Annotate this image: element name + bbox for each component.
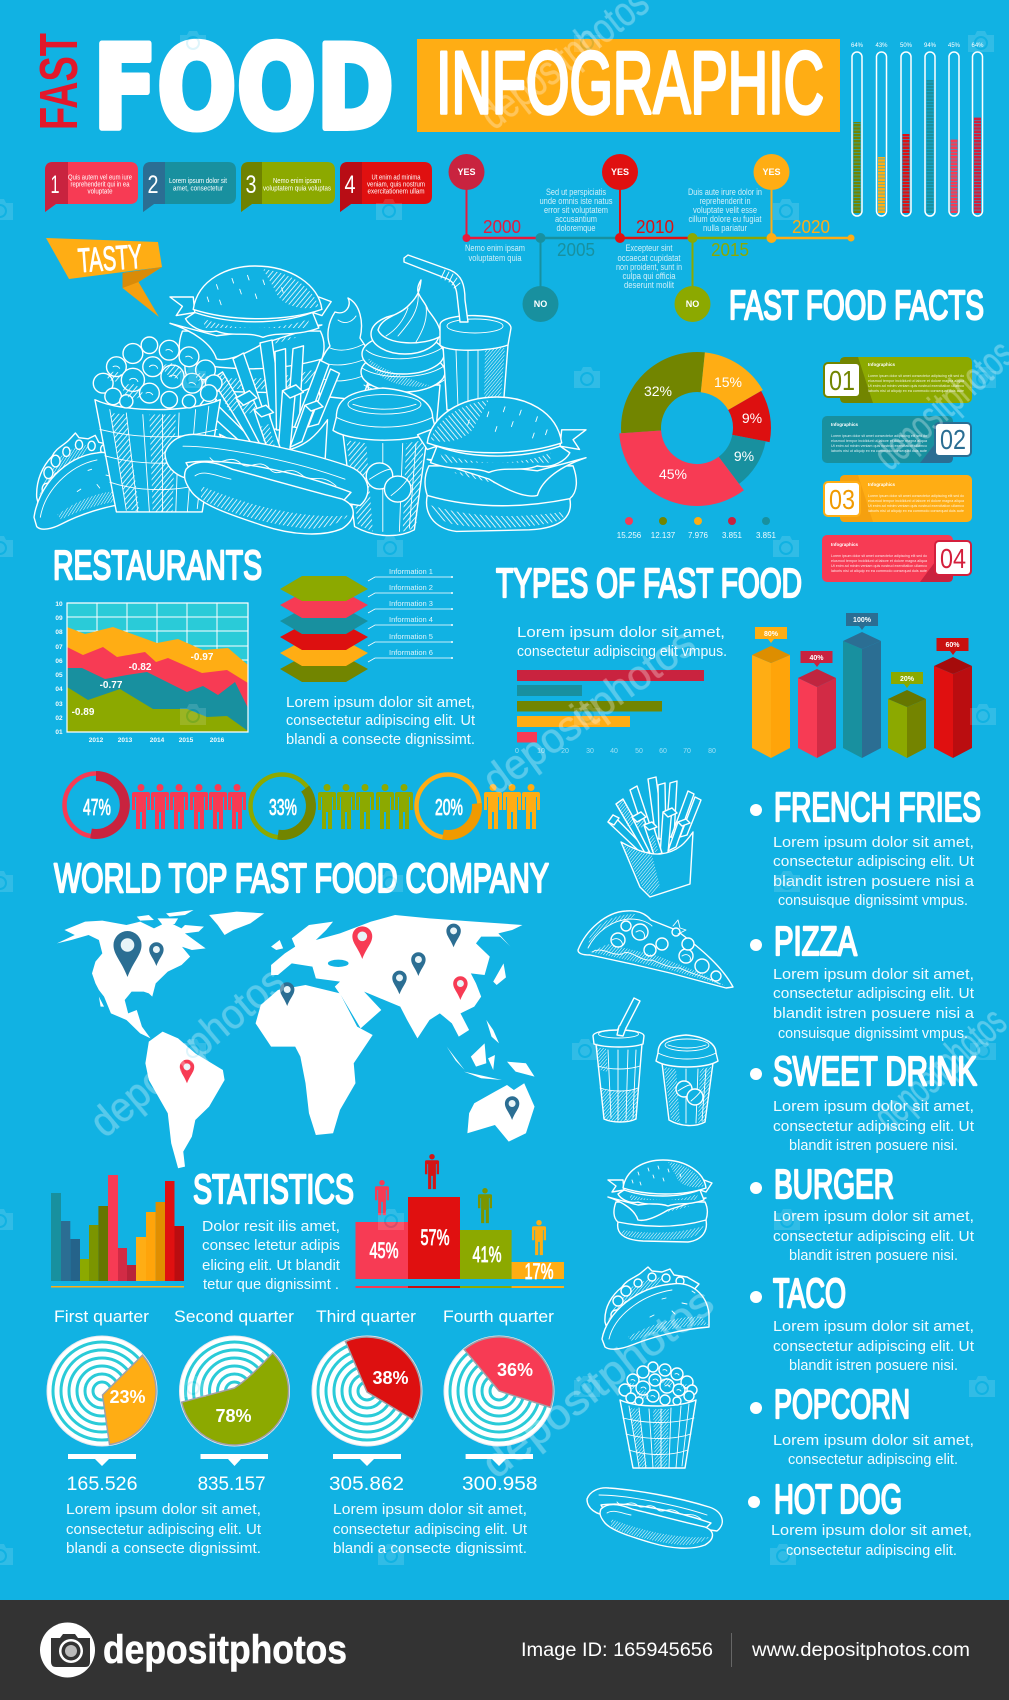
timeline: NO bbox=[686, 299, 699, 309]
horizontal bar chart: 50 bbox=[635, 748, 643, 755]
ring 33% bbox=[250, 774, 314, 838]
icon: taco bbox=[602, 1267, 709, 1349]
timeline: cillum dolore eu fugiat bbox=[688, 214, 762, 224]
timeline: 2000 bbox=[483, 217, 521, 237]
bar 100% bbox=[843, 613, 881, 758]
list: pizza bbox=[750, 918, 975, 1042]
horizontal bar chart bbox=[515, 670, 716, 755]
hexagon labels: Information 3 bbox=[389, 599, 433, 608]
list: french fries: blandit istren posuere nisi a bbox=[773, 874, 975, 890]
card 03: Lorem ipsum dolor sit amet consectetur adipiscing elit sed do bbox=[868, 493, 965, 498]
area chart: -0.89 bbox=[72, 707, 95, 718]
area chart: -0.97 bbox=[191, 652, 214, 663]
card 03 bbox=[824, 475, 972, 522]
paragraph: quarters right: consectetur adipiscing elit. Ut bbox=[333, 1522, 527, 1538]
list: sweet drink: blandit istren posuere nisi. bbox=[789, 1138, 958, 1154]
timeline: Sed ut perspiciatis bbox=[546, 187, 606, 197]
tab 3: voluptatem quia voluptas bbox=[263, 186, 331, 192]
timeline: voluptatem quia bbox=[468, 253, 522, 263]
icon: hot dog bbox=[587, 1488, 722, 1548]
bar 20%: 20% bbox=[900, 676, 915, 683]
ring 20%: 20% bbox=[435, 794, 463, 820]
list: french fries: consuisque dignissimt vmpus. bbox=[778, 893, 968, 909]
numbered tabs bbox=[45, 162, 432, 212]
area chart: 01 bbox=[55, 729, 63, 736]
watermark: depositphotos bbox=[473, 1278, 722, 1487]
icon: popcorn bbox=[619, 1362, 697, 1468]
card 04: Infographics bbox=[831, 542, 858, 547]
timeline: Duis aute irure dolor in bbox=[688, 187, 762, 197]
footer image id bbox=[521, 1633, 970, 1667]
paragraph: quarters right: Lorem ipsum dolor sit amet, bbox=[333, 1502, 527, 1518]
list: french fries bbox=[750, 784, 981, 909]
thermometer bars: 50% bbox=[900, 43, 913, 49]
paragraph: restaurants bbox=[286, 695, 475, 748]
area chart: 09 bbox=[55, 615, 63, 622]
donut chart: 9% bbox=[734, 448, 754, 464]
hexagon labels bbox=[368, 567, 453, 662]
hexagon labels: Information 6 bbox=[389, 648, 433, 657]
donut chart: 45% bbox=[659, 466, 687, 482]
timeline: nulla pariatur bbox=[703, 223, 747, 233]
area chart bbox=[55, 601, 248, 744]
paragraph: statistics bbox=[202, 1219, 340, 1293]
paragraph: types bbox=[517, 625, 727, 660]
card 02: laboris nisi ut aliquip ex ea commodo consequat duis aute bbox=[831, 448, 928, 453]
timeline: voluptate velit esse bbox=[693, 205, 757, 215]
food sketch collage bbox=[34, 255, 586, 536]
donut chart: 9% bbox=[742, 410, 762, 426]
quarter pie: fourth: 36% bbox=[497, 1360, 533, 1380]
quarter labels bbox=[54, 1308, 555, 1326]
card 03: Ut enim ad minim veniam quis nostrud exercitation ullamco bbox=[868, 503, 965, 508]
thermometer bars: 45% bbox=[948, 43, 961, 49]
card 02 bbox=[822, 416, 971, 463]
list: burger: Lorem ipsum dolor sit amet, bbox=[773, 1209, 974, 1225]
thermometer bars: 64% bbox=[971, 43, 984, 49]
area chart: 07 bbox=[55, 644, 63, 651]
list: pizza: PIZZA bbox=[774, 918, 857, 964]
heading: restaurants: RESTAURANTS bbox=[53, 542, 262, 588]
heading: statistics: STATISTICS bbox=[193, 1166, 354, 1212]
card 03: laboris nisi ut aliquip ex ea commodo consequat duis aute bbox=[868, 508, 965, 513]
card 01 bbox=[824, 357, 972, 403]
donut chart bbox=[617, 352, 777, 540]
thermometer bars: 64% bbox=[851, 43, 864, 49]
footer image id: Image ID: 165945656 bbox=[521, 1640, 713, 1661]
banner: tasty: TASTY bbox=[77, 238, 143, 280]
ring 33%: 33% bbox=[269, 794, 297, 820]
quarter labels: Second quarter bbox=[174, 1308, 295, 1326]
area chart: 10 bbox=[55, 601, 63, 608]
tab 4: veniam, quis nostrum bbox=[367, 182, 425, 188]
tab 2 bbox=[143, 162, 236, 212]
thermometer bars: 43% bbox=[875, 43, 888, 49]
horizontal bar chart: 20 bbox=[561, 748, 569, 755]
timeline: NO bbox=[534, 299, 547, 309]
card 01: eiusmod tempor incididunt ut labore et dolore magna aliqua bbox=[868, 378, 965, 383]
card 03: Infographics bbox=[868, 482, 895, 487]
tab 1 bbox=[45, 162, 138, 212]
donut legend: 7.976 bbox=[688, 531, 709, 540]
timeline: unde omnis iste natus bbox=[540, 196, 613, 206]
area chart: 06 bbox=[55, 658, 63, 665]
timeline: non proident, sunt in bbox=[616, 262, 682, 272]
timeline: deserunt mollit bbox=[624, 280, 674, 290]
card 01: Lorem ipsum dolor sit amet consectetur adipiscing elit sed do bbox=[868, 373, 965, 378]
list: hot dog: Lorem ipsum dolor sit amet, bbox=[771, 1523, 972, 1539]
donut legend bbox=[617, 517, 777, 540]
banner: tasty bbox=[46, 238, 162, 317]
timeline: YES bbox=[457, 167, 476, 177]
area chart: 2015 bbox=[179, 737, 194, 744]
paragraph: statistics: Dolor resit ilis amet, bbox=[202, 1219, 340, 1235]
card 01: Infographics bbox=[868, 362, 895, 367]
list: hot dog bbox=[748, 1476, 972, 1559]
tab 4: exercitationem ullam bbox=[368, 188, 425, 196]
footer logo bbox=[40, 1622, 347, 1678]
card 04: Lorem ipsum dolor sit amet consectetur adipiscing elit sed do bbox=[831, 553, 928, 558]
card 04: eiusmod tempor incididunt ut labore et dolore magna aliqua bbox=[831, 558, 928, 563]
paragraph: quarters left: blandi a consecte dignissimt. bbox=[66, 1541, 261, 1557]
quarter pie: third: 38% bbox=[372, 1368, 409, 1388]
list: sweet drink bbox=[750, 1048, 977, 1154]
paragraph: types: consectetur adipiscing elit vmpus. bbox=[517, 644, 727, 660]
list: burger: consectetur adipiscing elit. Ut bbox=[773, 1229, 974, 1245]
horizontal bar chart: 0 bbox=[515, 748, 519, 755]
red people bbox=[132, 784, 246, 829]
list: burger: blandit istren posuere nisi. bbox=[789, 1248, 958, 1264]
ring 47%: 47% bbox=[83, 794, 111, 820]
list: hot dog: consectetur adipiscing elit. bbox=[786, 1543, 957, 1559]
heading: types of fast food: TYPES OF FAST FOOD bbox=[496, 560, 802, 606]
heading: world top fast food company: WORLD TOP FAST FOOD COMPANY bbox=[54, 855, 549, 901]
timeline: error sit voluptatem bbox=[544, 205, 608, 215]
quarter pie: second: 835.157 bbox=[198, 1474, 266, 1495]
card 01: laboris nisi ut aliquip ex ea commodo consequat duis aute bbox=[868, 388, 965, 393]
list: sweet drink: consectetur adipiscing elit. Ut bbox=[773, 1119, 974, 1135]
paragraph: restaurants: Lorem ipsum dolor sit amet, bbox=[286, 695, 475, 711]
timeline: 2020 bbox=[792, 217, 830, 237]
tab 1: Quis autem vel eum iure bbox=[68, 174, 132, 182]
quarter pie: first bbox=[47, 1336, 157, 1495]
timeline: Nemo enim ipsam bbox=[465, 243, 525, 253]
3d bar chart bbox=[752, 613, 972, 758]
donut chart: 32% bbox=[644, 383, 672, 399]
column chart bbox=[51, 1175, 184, 1288]
podium chart: 17% bbox=[524, 1259, 554, 1284]
quarter pie: first: 23% bbox=[109, 1387, 146, 1407]
list: pizza: consuisque dignissimt vmpus. bbox=[778, 1026, 968, 1042]
timeline: YES bbox=[611, 167, 629, 177]
timeline: Excepteur sint bbox=[626, 243, 673, 253]
area chart: 02 bbox=[55, 715, 63, 722]
bar 80% bbox=[752, 627, 790, 758]
horizontal bar chart: 60 bbox=[659, 748, 667, 755]
quarter pie: second: 78% bbox=[215, 1406, 252, 1426]
card 03: 03 bbox=[829, 484, 855, 515]
area chart: 2012 bbox=[89, 737, 104, 744]
tab 2: amet, consectetur bbox=[173, 186, 224, 192]
quarter labels: First quarter bbox=[54, 1308, 150, 1326]
watermark: depositphotos bbox=[81, 957, 293, 1146]
bar 60%: 60% bbox=[945, 642, 960, 649]
bar 40% bbox=[798, 651, 836, 758]
list: popcorn: POPCORN bbox=[774, 1381, 910, 1427]
tab 3: 3 bbox=[246, 171, 256, 199]
bar 80%: 80% bbox=[764, 631, 779, 638]
list: popcorn: Lorem ipsum dolor sit amet, bbox=[773, 1433, 974, 1449]
donut legend: 15.256 bbox=[617, 531, 642, 540]
card 04: laboris nisi ut aliquip ex ea commodo consequat duis aute bbox=[831, 568, 928, 573]
paragraph: statistics: elicing elit. Ut blandit bbox=[202, 1258, 340, 1274]
footer logo: depositphotos bbox=[103, 1628, 347, 1672]
timeline bbox=[448, 154, 854, 322]
tab 3 bbox=[241, 162, 335, 212]
footer bar bbox=[0, 1600, 1009, 1700]
quarter pie: first: 165.526 bbox=[66, 1474, 138, 1495]
watermark: depositphotos bbox=[474, 618, 704, 803]
list: french fries: consectetur adipiscing elit. Ut bbox=[773, 854, 974, 870]
area chart: 2014 bbox=[150, 737, 165, 744]
card 01: Ut enim ad minim veniam quis nostrud exercitation ullamco bbox=[868, 383, 965, 388]
podium chart: 57% bbox=[420, 1225, 450, 1250]
title bbox=[29, 21, 840, 156]
quarter pie: fourth: 300.958 bbox=[462, 1474, 538, 1495]
stacked hexagons bbox=[280, 567, 453, 682]
list: pizza: Lorem ipsum dolor sit amet, bbox=[773, 967, 974, 983]
card 04: 04 bbox=[940, 543, 966, 574]
icon: french fries bbox=[608, 777, 701, 897]
area chart: 03 bbox=[55, 701, 63, 708]
donut legend: 3.851 bbox=[756, 531, 777, 540]
list: pizza: blandit istren posuere nisi a bbox=[773, 1006, 975, 1022]
card 02: Ut enim ad minim veniam quis nostrud exercitation ullamco bbox=[831, 443, 928, 448]
podium chart: 41% bbox=[472, 1242, 502, 1267]
timeline: culpa qui officia bbox=[622, 271, 676, 281]
list: taco: TACO bbox=[773, 1270, 846, 1316]
paragraph: types: Lorem ipsum dolor sit amet, bbox=[517, 625, 725, 641]
icon: drinks bbox=[593, 998, 718, 1126]
tab 4 bbox=[340, 162, 432, 212]
list: french fries: Lorem ipsum dolor sit amet, bbox=[773, 835, 974, 851]
horizontal bar chart: 80 bbox=[708, 748, 716, 755]
tab 1: 1 bbox=[50, 171, 60, 199]
paragraph: quarters left: consectetur adipiscing elit. Ut bbox=[66, 1522, 261, 1538]
ring 47% bbox=[64, 774, 128, 836]
area chart: 2013 bbox=[118, 737, 133, 744]
bar 100%: 100% bbox=[853, 617, 872, 624]
donut chart: 15% bbox=[714, 374, 742, 390]
quarter pie: third: 305.862 bbox=[329, 1474, 404, 1495]
donut legend: 3.851 bbox=[722, 531, 743, 540]
card 03: eiusmod tempor incididunt ut labore et dolore magna aliqua bbox=[868, 498, 965, 503]
donut legend: 12.137 bbox=[651, 531, 676, 540]
timeline: reprehenderit in bbox=[700, 196, 750, 206]
hexagon labels: Information 1 bbox=[389, 567, 433, 576]
tab 4: Ut enim ad minima bbox=[372, 174, 421, 182]
thermometer bars bbox=[851, 43, 984, 216]
map pins bbox=[114, 924, 519, 1120]
list: taco: Lorem ipsum dolor sit amet, bbox=[773, 1319, 974, 1335]
podium chart: 45% bbox=[370, 1238, 398, 1263]
timeline: accusantium bbox=[555, 214, 597, 224]
title: FOOD bbox=[93, 21, 394, 156]
paragraph: quarters right bbox=[333, 1502, 527, 1557]
paragraph: statistics: tetur que dignissimt . bbox=[203, 1277, 339, 1293]
list: burger: BURGER bbox=[774, 1161, 894, 1207]
card 01: 01 bbox=[829, 365, 855, 396]
timeline: 2005 bbox=[557, 240, 595, 260]
paragraph: restaurants: blandi a consecte dignissimt. bbox=[286, 732, 475, 748]
horizontal bar chart: 10 bbox=[537, 748, 545, 755]
tab 1: reprehenderit qui in ea bbox=[70, 182, 130, 188]
quarter labels: Fourth quarter bbox=[443, 1308, 555, 1326]
fact cards bbox=[822, 357, 972, 582]
list: popcorn bbox=[750, 1381, 974, 1468]
horizontal bar chart: 40 bbox=[610, 748, 618, 755]
tab 2: Lorem ipsum dolor sit bbox=[169, 178, 227, 185]
card 02: Infographics bbox=[831, 422, 858, 427]
paragraph: quarters left: Lorem ipsum dolor sit amet, bbox=[66, 1502, 261, 1518]
area chart: 2016 bbox=[210, 737, 225, 744]
hexagon labels: Information 2 bbox=[389, 583, 433, 592]
list: pizza: consectetur adipiscing elit. Ut bbox=[773, 986, 974, 1002]
timeline: 2010 bbox=[636, 217, 674, 237]
paragraph: restaurants: consectetur adipiscing elit. Ut bbox=[286, 713, 475, 729]
area chart: -0.77 bbox=[100, 680, 123, 691]
tab 2: 2 bbox=[148, 171, 158, 199]
horizontal bar chart: 30 bbox=[586, 748, 594, 755]
icon: burger bbox=[608, 1160, 712, 1242]
card 04 bbox=[822, 535, 971, 582]
card 02: 02 bbox=[940, 424, 966, 455]
tab 3: Nemo enim ipsam bbox=[273, 178, 321, 185]
quarter labels: Third quarter bbox=[316, 1308, 417, 1326]
list: burger bbox=[750, 1161, 974, 1264]
bar 60% bbox=[934, 638, 972, 758]
footer image id: www.depositphotos.com bbox=[751, 1640, 970, 1661]
card 02: Lorem ipsum dolor sit amet consectetur adipiscing elit sed do bbox=[831, 433, 928, 438]
horizontal bar chart: 70 bbox=[683, 748, 691, 755]
quarter pie: third bbox=[312, 1336, 422, 1495]
area chart: 05 bbox=[55, 672, 63, 679]
green people bbox=[318, 784, 413, 829]
list: sweet drink: Lorem ipsum dolor sit amet, bbox=[773, 1099, 974, 1115]
quarter pie: second bbox=[180, 1336, 290, 1495]
thermometer bars: 94% bbox=[924, 43, 937, 49]
hexagon labels: Information 5 bbox=[389, 632, 433, 641]
timeline: occaecat cupidatat bbox=[618, 253, 681, 263]
list: popcorn: consectetur adipiscing elit. bbox=[788, 1452, 958, 1468]
paragraph: quarters right: blandi a consecte dignissimt. bbox=[333, 1541, 527, 1557]
timeline: 2015 bbox=[711, 240, 749, 260]
card 02: eiusmod tempor incididunt ut labore et dolore magna aliqua bbox=[831, 438, 928, 443]
list: taco bbox=[750, 1270, 974, 1374]
paragraph: statistics: consec letetur adipis bbox=[202, 1238, 340, 1254]
ring 20% bbox=[416, 774, 480, 838]
tab 1: voluptate bbox=[88, 188, 113, 196]
quarter pie: fourth bbox=[444, 1336, 554, 1495]
card 04: Ut enim ad minim veniam quis nostrud exercitation ullamco bbox=[831, 563, 928, 568]
area chart: 08 bbox=[55, 629, 63, 636]
world map bbox=[57, 910, 535, 1168]
area chart: -0.82 bbox=[129, 662, 152, 673]
list: hot dog: HOT DOG bbox=[774, 1476, 902, 1522]
people ring row bbox=[64, 774, 540, 838]
list: taco: consectetur adipiscing elit. Ut bbox=[773, 1339, 974, 1355]
orange people bbox=[484, 784, 540, 829]
podium chart bbox=[356, 1154, 564, 1288]
paragraph: quarters left bbox=[66, 1502, 261, 1557]
tab 4: 4 bbox=[344, 171, 356, 199]
bar 40%: 40% bbox=[809, 655, 824, 662]
timeline: doloremque bbox=[556, 223, 596, 233]
bar 20% bbox=[888, 672, 926, 758]
hexagon labels: Information 4 bbox=[389, 615, 433, 624]
area chart: 04 bbox=[55, 686, 63, 693]
timeline: YES bbox=[762, 167, 781, 177]
list: taco: blandit istren posuere nisi. bbox=[789, 1358, 958, 1374]
icon: pizza bbox=[578, 911, 733, 988]
